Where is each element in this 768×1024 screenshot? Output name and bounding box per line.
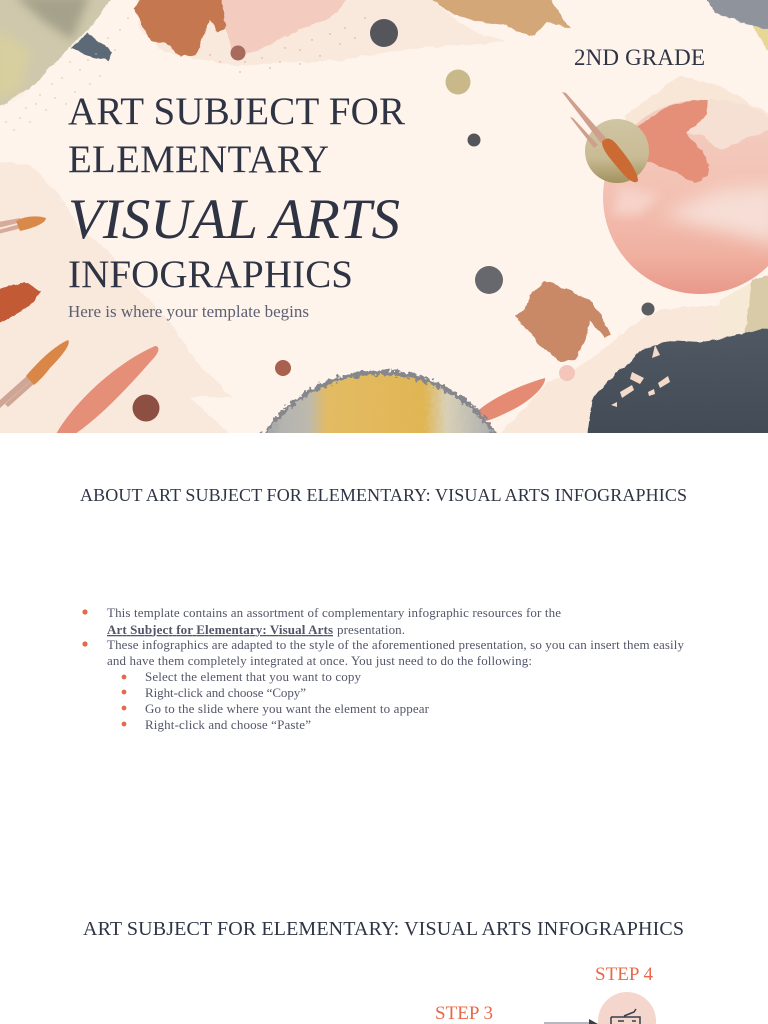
list bullets: [82, 609, 126, 726]
heading: about: ABOUT ART SUBJECT FOR ELEMENTARY: VISUAL ARTS INFOGRAPHICS: [80, 485, 687, 505]
wash: top-right grey and yellow: [707, 0, 768, 51]
big pink watercolor circle: [603, 76, 768, 294]
step 4 label: STEP 4: [595, 964, 654, 985]
pink wash: top: [220, 0, 356, 55]
list text: Select the element that you want to copy: [145, 669, 362, 684]
title: INFOGRAPHICS: [68, 253, 353, 296]
step 3 label: STEP 3: [435, 1003, 493, 1024]
list text: Right-click and choose “Copy”: [145, 685, 306, 700]
dark watercolor mound: [588, 328, 768, 433]
beige wash: bottom right: [502, 305, 735, 433]
list text: This template contains an assortment of complementary infographic resources for the: [107, 605, 561, 620]
left brushes: [0, 216, 158, 436]
list text: Go to the slide where you want the element to appear: [145, 701, 430, 716]
heading: infographic section: ART SUBJECT FOR ELEMENTARY: VISUAL ARTS INFOGRAPHICS: [83, 918, 684, 940]
small paint dots: [132, 19, 654, 422]
list text: and have them completely integrated at once. You just need to do the following:: [107, 653, 532, 668]
coral brush stroke: lower right: [478, 378, 545, 422]
beige wash: top centre: [135, 0, 505, 66]
list text: Art Subject for Elementary: Visual Arts: [107, 622, 333, 637]
brown splash: top: [133, 0, 228, 57]
list text: [107, 605, 684, 732]
list text: These infographics are adapted to the style of the aforementioned presentation, so you can insert them easily: [107, 637, 684, 652]
title: ART SUBJECT FOR: [68, 90, 405, 133]
icon: radio on pink circle: [598, 992, 656, 1024]
orange streak: top: [418, 0, 570, 36]
panel: watercolor hero banner: [0, 0, 768, 433]
grade label: 2ND GRADE: [574, 45, 705, 70]
gold-dust patch: right: [720, 276, 768, 335]
list text: Right-click and choose “Paste”: [145, 717, 311, 732]
subtitle: Here is where your template begins: [68, 302, 309, 321]
speckles: pink dust: [210, 18, 365, 72]
olive circle with brush stroke: [562, 92, 649, 183]
title: [68, 90, 405, 296]
bullet list: [82, 605, 684, 732]
arrow: step 3 to step 4: [544, 1019, 598, 1024]
list text: presentation.: [337, 622, 405, 637]
speckles: gold dust: [6, 18, 128, 130]
beige wash: left side: [0, 160, 240, 445]
wash: top-left olive and gold: [0, 0, 112, 106]
pale flakes on dark mound: [611, 345, 670, 407]
title: VISUAL ARTS: [68, 188, 400, 251]
title: ELEMENTARY: [68, 138, 329, 181]
brown blob: lower right: [515, 281, 611, 361]
gold and grey planet: [260, 368, 497, 433]
